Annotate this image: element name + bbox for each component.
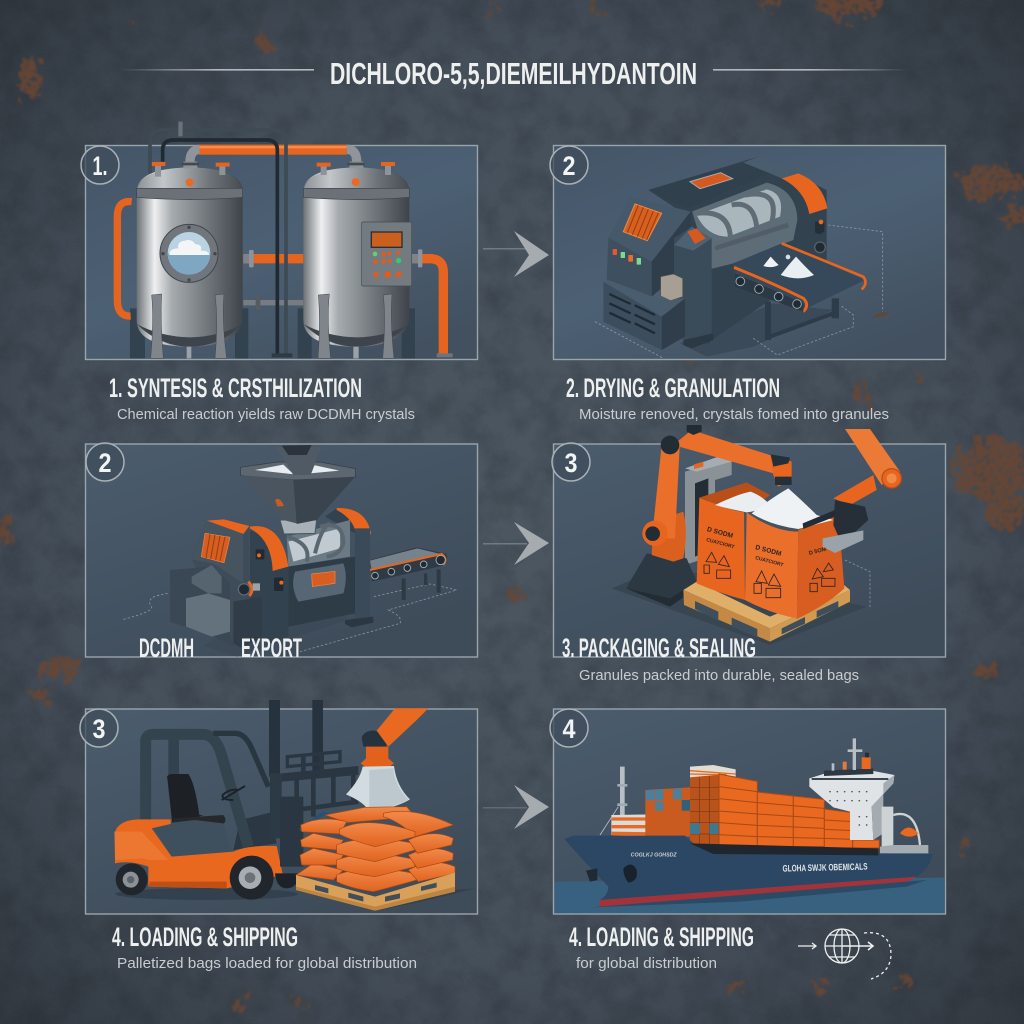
caption: packaging: Granules packed into durable, sealed bags	[579, 668, 859, 684]
heading: drying: 2. DRYING & GRANULATION	[566, 373, 780, 403]
panel: container ship	[550, 709, 946, 914]
panel: forklift	[80, 700, 478, 914]
panel: drying machine	[550, 146, 946, 360]
arrow: step 1 to step 2	[483, 231, 549, 277]
label: DCDMH: DCDMH	[139, 633, 194, 663]
badge: 3 second	[80, 709, 118, 747]
icon: robot arms filling bulk bags on pallet: CUATCIORT	[754, 555, 784, 568]
title: DICHLORO-5,5,DIEMEILHYDANTOIN	[330, 56, 697, 91]
badge: 3	[552, 443, 590, 481]
arrow: step 3 to step 4	[483, 522, 549, 565]
caption: drying: Moisture renoved, crystals fomed into granules	[579, 407, 889, 423]
heading: packaging: 3. PACKAGING & SEALING	[562, 633, 756, 663]
panel: packaging	[552, 425, 946, 657]
icon: drying drum and conveyor	[595, 157, 889, 358]
heading: synthesis: 1. SYNTESIS & CRSTHILIZATION	[109, 373, 362, 403]
panel: synthesis tanks	[81, 122, 478, 359]
arrow: step 5 to step 6	[483, 785, 549, 829]
icon: robot arms filling bulk bags on pallet: D 5OM	[808, 546, 827, 557]
caption: loading left: Palletized bags loaded for global distribution	[117, 956, 417, 972]
label: EXPORT: EXPORT	[241, 633, 302, 663]
heading: loading left: 4. LOADING & SHIPPING	[112, 922, 298, 952]
icon: robot arms filling bulk bags on pallet	[612, 425, 901, 645]
caption: global distribution: for global distribution	[576, 956, 717, 972]
icon: robot arms filling bulk bags on pallet: D SODM	[754, 544, 782, 558]
badge: 3: 3	[564, 448, 578, 478]
heading: loading right: 4. LOADING & SHIPPING	[569, 922, 754, 952]
icon: forklift and palletized bags	[114, 700, 477, 911]
badge: 2	[550, 146, 588, 184]
badge: 2 second	[86, 443, 124, 481]
icon: granulating extruder	[123, 445, 457, 657]
icon: robot arms filling bulk bags on pallet: CUATCIORT	[705, 537, 735, 550]
icon: reactor tanks and pipes	[117, 122, 453, 358]
icon: globe with arrows	[798, 929, 891, 979]
icon: robot arms filling bulk bags on pallet: D SODM	[706, 526, 734, 540]
badge: 3 second: 3	[92, 714, 106, 744]
badge: 2: 2	[562, 151, 576, 181]
icon: container ship: COGLKJ GOHSDZ	[631, 853, 677, 859]
badge: 1: 1.	[92, 151, 108, 181]
caption: synthesis: Chemical reaction yields raw DCDMH crystals	[117, 407, 415, 423]
badge: 4: 4	[562, 714, 576, 744]
badge: 1	[81, 146, 119, 184]
icon: container ship	[554, 738, 944, 913]
badge: 2 second: 2	[98, 448, 112, 478]
badge: 4	[550, 709, 588, 747]
panel: extruder	[86, 443, 478, 663]
icon: container ship: GLOHA SWJK OBEMICALS	[782, 862, 868, 874]
